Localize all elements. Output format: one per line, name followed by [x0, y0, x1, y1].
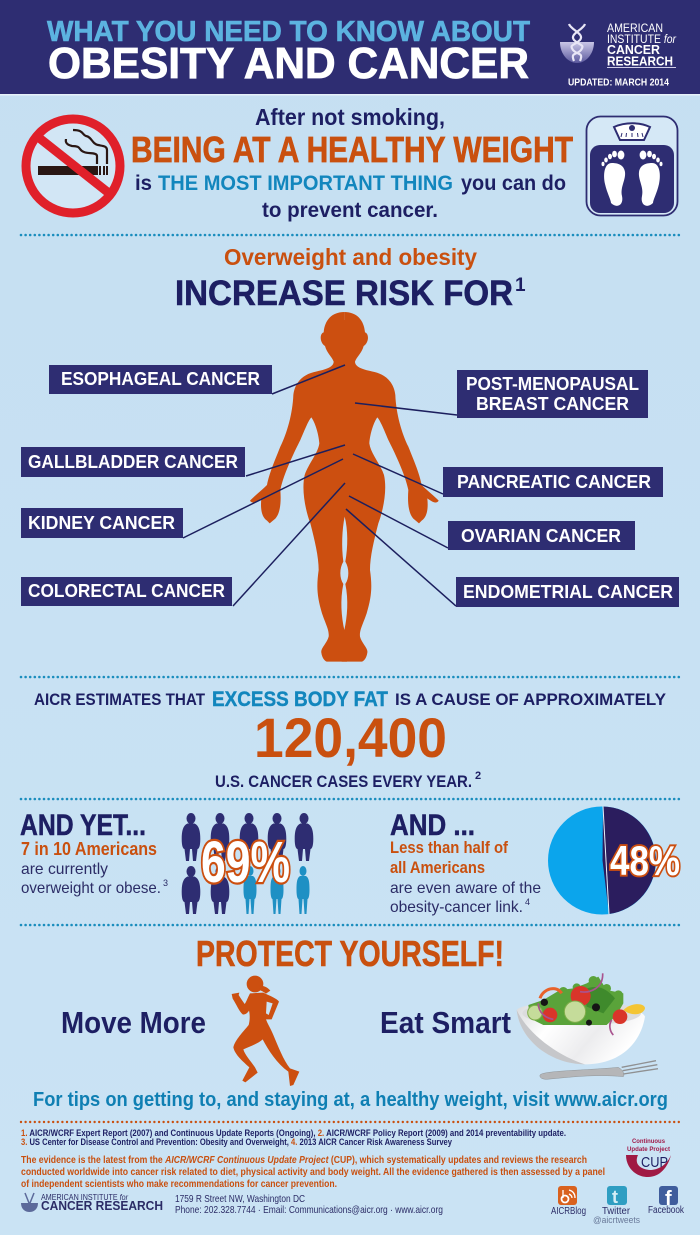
panel: 7 in 10 Americans: AND YET...	[20, 809, 146, 842]
label: ovarian cancer	[448, 521, 635, 550]
panel: 7 in 10 Americans: 3	[163, 878, 168, 888]
panel: less than half aware	[390, 806, 680, 916]
intro text: to prevent cancer.	[262, 199, 438, 222]
address	[175, 1193, 443, 1216]
icon: bathroom scale	[586, 116, 678, 216]
evidence statement: conducted worldwide into cancer risk related to diet, physical activity and body weight. All the evidence gathered is then assessed by a panel	[21, 1167, 605, 1178]
label: gallbladder cancer	[21, 447, 245, 477]
CUP logo: CUP	[641, 1154, 668, 1171]
eat smart: Eat Smart	[380, 1005, 511, 1040]
excess body fat statistic: U.S. CANCER CASES EVERY YEAR.	[215, 773, 472, 791]
move more: Move More	[61, 1005, 206, 1040]
AICR logo: CANCER	[607, 43, 660, 57]
label: kidney cancer: KIDNEY CANCER	[28, 513, 175, 533]
CUP logo	[626, 1138, 671, 1177]
label: colorectal cancer: COLORECTAL CANCER	[28, 581, 225, 601]
intro text	[131, 104, 573, 222]
risk heading: 1	[515, 275, 526, 296]
intro text: After not smoking,	[255, 104, 445, 130]
panel: 7 in 10 Americans: overweight or obese.	[21, 880, 161, 897]
panel: less than half aware: Less than half of	[390, 838, 508, 857]
panel: less than half aware: AND ...	[390, 809, 475, 842]
risk heading: Overweight and obesity	[224, 244, 477, 270]
intro text: THE MOST IMPORTANT THING	[158, 172, 453, 195]
AICR logo: RESEARCH	[607, 54, 673, 68]
address: 1759 R Street NW, Washington DC	[175, 1193, 305, 1205]
connector lines	[183, 365, 457, 606]
people pictogram	[182, 813, 313, 914]
label: endometrial cancer: ENDOMETRIAL CANCER	[463, 582, 673, 602]
excess body fat statistic: 2	[475, 770, 481, 782]
pie chart	[548, 806, 656, 914]
CUP logo: Continuous	[632, 1138, 665, 1145]
icon: salad bowl with fork	[517, 973, 658, 1079]
label: esophageal cancer	[49, 365, 272, 394]
label: ovarian cancer: OVARIAN CANCER	[461, 526, 621, 546]
label: esophageal cancer: ESOPHAGEAL CANCER	[61, 369, 260, 389]
excess body fat statistic	[34, 687, 666, 791]
headline: BEING AT A HEALTHY WEIGHT	[131, 129, 573, 170]
panel: less than half aware: obesity-cancer link.	[390, 899, 523, 916]
icon: facebook: Facebook	[648, 1205, 685, 1216]
footnotes	[21, 1128, 566, 1147]
footnotes: 1. AICR/WCRF Expert Report (2007) and Continuous Update Reports (Ongoing), 2. AICR/WCRF Policy Report (2009) and 2014 preventability update.	[21, 1128, 566, 1138]
heading: protect yourself: PROTECT YOURSELF!	[196, 933, 504, 974]
48 percent: 48%	[610, 837, 680, 884]
risk heading	[175, 244, 526, 313]
footer AICR logo	[21, 1193, 163, 1213]
icon: twitter	[593, 1186, 640, 1225]
label: gallbladder cancer: GALLBLADDER CANCER	[28, 452, 238, 472]
icon: twitter: Twitter	[602, 1206, 631, 1217]
icon: facebook: f	[665, 1188, 672, 1210]
AICR logo: INSTITUTE for	[607, 32, 677, 46]
address: Phone: 202.328.7744 · Email: Communications@aicr.org · www.aicr.org	[175, 1204, 443, 1216]
evidence statement: The evidence is the latest from the AICR/WCRF Continuous Update Project (CUP), which systematically updates and reviews the research	[21, 1155, 587, 1166]
label: colorectal cancer	[21, 577, 232, 606]
icon: twitter: t	[612, 1187, 618, 1207]
body silhouette	[250, 312, 439, 662]
label: pancreatic cancer	[443, 467, 663, 497]
risk heading: INCREASE RISK FOR	[175, 274, 513, 313]
label: pancreatic cancer: PANCREATIC CANCER	[457, 472, 651, 492]
panel: 7 in 10 Americans: 7 in 10 Americans	[21, 839, 157, 859]
AICR logo: AMERICAN	[607, 21, 663, 35]
footnotes: 3. US Center for Disease Control and Prevention: Obesity and Overweight, 4. 2013 AICR Cancer Risk Awareness Survey	[21, 1137, 452, 1147]
panel: less than half aware: all Americans	[390, 858, 485, 877]
panel: 7 in 10 Americans	[20, 809, 313, 914]
title line 1: WHAT YOU NEED TO KNOW ABOUT	[47, 16, 531, 48]
evidence statement	[21, 1155, 605, 1190]
icon: no smoking	[22, 115, 124, 217]
label: kidney cancer	[21, 508, 183, 538]
title line 2: OBESITY AND CANCER	[48, 39, 529, 88]
label: post-menopausal breast cancer: BREAST CANCER	[476, 394, 629, 414]
excess body fat statistic: IS A CAUSE OF APPROXIMATELY	[395, 691, 666, 709]
excess body fat statistic: AICR ESTIMATES THAT	[34, 691, 205, 709]
footer AICR logo: AMERICAN INSTITUTE for	[41, 1193, 128, 1202]
footer AICR logo: CANCER RESEARCH	[41, 1199, 163, 1213]
AICR logo	[560, 21, 677, 68]
panel: 7 in 10 Americans: are currently	[21, 861, 108, 878]
icon: runner	[232, 976, 299, 1086]
big number: 120,400	[254, 706, 447, 769]
label: post-menopausal breast cancer: POST-MENOPAUSAL	[466, 374, 639, 394]
intro text: you can do	[461, 172, 566, 195]
icon: blog	[551, 1186, 586, 1217]
icon: facebook	[648, 1186, 685, 1216]
label: endometrial cancer	[456, 577, 679, 607]
updated date: UPDATED: MARCH 2014	[568, 76, 669, 88]
icon: blog: AICRBlog	[551, 1206, 586, 1217]
evidence statement: of independent scientists who make recommendations for cancer prevention.	[21, 1179, 337, 1190]
CUP logo: Update Project	[627, 1146, 671, 1153]
panel: less than half aware: 4	[525, 897, 530, 907]
label: post-menopausal breast cancer	[457, 370, 648, 418]
panel: less than half aware: are even aware of the	[390, 880, 541, 897]
excess body fat statistic: EXCESS BODY FAT	[212, 687, 388, 711]
intro text: is	[135, 172, 152, 195]
header banner	[0, 0, 700, 96]
icon: twitter: @aicrtweets	[593, 1215, 640, 1225]
69 percent: 69%	[201, 830, 290, 895]
